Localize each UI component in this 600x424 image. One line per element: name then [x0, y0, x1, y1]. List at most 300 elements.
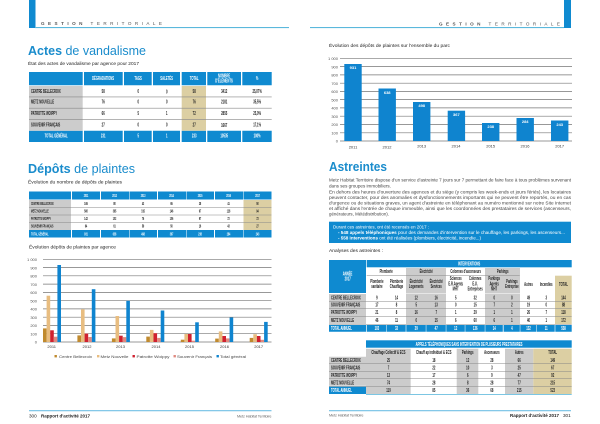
- table: appels telephoniques sans intervention: 17: [432, 372, 436, 378]
- table: appels telephoniques sans intervention: 119: [386, 387, 391, 393]
- table: depots de plaintes par annee: METZ NOUVELLE: [31, 209, 49, 214]
- table: interventions d'astreinte: 103: [375, 325, 380, 331]
- table: interventions d'astreinte: Autres: [524, 281, 533, 287]
- table: interventions d'astreinte: Entreprises: [468, 286, 483, 292]
- table: interventions d'astreinte: 5: [455, 295, 457, 301]
- bar chart: depots par agence: 2014: [152, 344, 161, 349]
- table: interventions d'astreinte: 15: [435, 317, 438, 323]
- bar chart: depots ensemble du parc: 300: [331, 114, 339, 119]
- table: appels telephoniques sans intervention: 25: [518, 364, 521, 371]
- subtitle: evolution sur le parc: Évolution des dépôts de plaintes sur l'ensemble du parc: [329, 42, 451, 48]
- table: appels telephoniques sans intervention: PATROTTE WOIPPY: [331, 372, 357, 378]
- paragraph: astreintes: et affiché dans l'entrée de chaque immeuble, ainsi que les coordonnées des prestataires de services (ascenseurs,: [329, 206, 571, 211]
- table: appels telephoniques sans intervention: 215: [550, 379, 556, 386]
- table: interventions d'astreinte: 47: [435, 325, 438, 331]
- table: interventions d'astreinte: 12: [454, 325, 458, 331]
- table: interventions d'astreinte: 136: [473, 325, 478, 331]
- table: interventions d'astreinte: INTERVENTIONS: [458, 260, 480, 267]
- table: actes de vandalisme par agence: 25,07%: [252, 88, 262, 94]
- bar chart: depots par agence: 2013: [116, 344, 126, 349]
- table: appels telephoniques sans intervention: 25: [387, 357, 391, 363]
- chart legend: Metz Nouvelle: [100, 354, 129, 359]
- subtitle: evolution du nombre: Évolution du nombre de dépôts de plaintes: [28, 178, 123, 184]
- table: depots de plaintes par annee: 2013: [141, 193, 145, 198]
- table: interventions d'astreinte: 19: [527, 302, 531, 308]
- table: appels telephoniques sans intervention: 8: [467, 379, 469, 386]
- table: interventions d'astreinte: 29: [474, 309, 477, 315]
- table: appels telephoniques sans intervention: 523: [550, 387, 556, 393]
- table: interventions d'astreinte: Colonnes: [469, 275, 482, 281]
- bar chart: depots par agence: 900: [30, 265, 38, 270]
- callout: bilan des astreintes: - 558 interventions ont été réalisées (plombiers, électricité, incendie...): [338, 236, 481, 240]
- paragraph: astreintes: dans ses groupes immobiliers.: [329, 184, 391, 188]
- table: depots de plaintes par annee: 2011: [84, 193, 88, 198]
- table: appels telephoniques sans intervention: 10: [466, 364, 470, 371]
- table: appels telephoniques sans intervention: 28: [490, 357, 494, 363]
- bar chart: depots par agence: 2012: [83, 344, 92, 349]
- table: interventions d'astreinte: 49: [527, 295, 531, 301]
- bar chart: depots ensemble du parc: 2015: [486, 144, 496, 148]
- table: depots de plaintes par annee: 97: [199, 209, 201, 214]
- table: actes de vandalisme par agence: 35,5%: [253, 99, 261, 105]
- heading: astreintes: Astreintes: [329, 160, 387, 174]
- table: interventions d'astreinte: PATROTTE WOIPPY: [331, 309, 357, 315]
- table: depots de plaintes par annee: 80: [113, 201, 116, 206]
- chart legend: [54, 354, 246, 359]
- table: actes de vandalisme par agence: 58: [193, 88, 196, 94]
- bar chart: depots ensemble du parc: 238: [487, 124, 495, 129]
- table: actes de vandalisme par agence: DÉGRADATIONS: [92, 75, 114, 81]
- table: interventions d'astreinte: 1: [455, 309, 457, 315]
- table: interventions d'astreinte: 132: [526, 325, 531, 331]
- table: appels telephoniques sans intervention: 85: [432, 387, 436, 393]
- table: interventions d'astreinte: Colonnes d'ascenseurs: [450, 268, 482, 274]
- bar chart: depots ensemble du parc: 200: [331, 122, 339, 127]
- table: appels telephoniques sans intervention: 7: [388, 364, 390, 371]
- table: depots de plaintes par annee: 72: [256, 216, 259, 221]
- table: interventions d'astreinte: 0: [545, 302, 547, 308]
- table: interventions d'astreinte: Entreprise: [505, 283, 519, 289]
- paragraph: astreintes: d'urgence ou de situations graves, un agent d'astreinte en téléphonant au numéro mentionné sur notre Site Internet: [329, 200, 572, 206]
- table: depots de plaintes par annee: 128: [227, 209, 230, 214]
- bar chart: depots ensemble du parc: 284: [522, 119, 529, 124]
- table: depots de plaintes par annee: SOUVENIR FRANÇAIS: [31, 224, 54, 229]
- table: depots de plaintes par annee: 76: [142, 216, 144, 221]
- bar chart: depots ensemble du parc: 800: [331, 73, 339, 78]
- bar chart: depots par agence: 700: [30, 282, 38, 287]
- table: interventions d'astreinte: Logements: [409, 283, 424, 289]
- bar chart: depots ensemble du parc: 2011: [349, 144, 358, 150]
- table: actes de vandalisme par agence: D'ÉLÉMENTS: [215, 78, 233, 84]
- table: depots de plaintes par annee: 28: [199, 201, 201, 206]
- table: depots de plaintes par annee: 43: [142, 201, 144, 206]
- callout: bilan des astreintes: Durant ces astreintes, ont été recensés en 2017 :: [333, 224, 429, 230]
- table: appels telephoniques sans intervention: 215: [517, 387, 522, 393]
- paragraph: astreintes: peuvent contacter, pour des anomalies et dysfonctionnements importants qui ne peuvent être reportés, ou en cas: [329, 195, 572, 200]
- table: actes de vandalisme par agence: 2855: [221, 110, 228, 116]
- table: interventions d'astreinte: 9: [376, 295, 378, 301]
- callout: bilan des astreintes: - 548 appels téléphoniques pour des demandes d'intervention sur le chauffage, les parkings, les ascenseurs...: [338, 230, 565, 235]
- table: interventions d'astreinte: 5: [415, 302, 417, 308]
- table: interventions d'astreinte: TOTAL: [559, 281, 568, 287]
- table: appels telephoniques sans intervention: TOTAL: [548, 349, 557, 355]
- table: depots de plaintes par annee: CENTRE BELLECROIX: [31, 201, 54, 206]
- paragraph: astreintes: générateurs, Métédistribution).: [329, 212, 389, 216]
- table: depots de plaintes par annee: 238: [198, 232, 202, 237]
- table: depots de plaintes par annee: 64: [85, 224, 87, 229]
- table: appels telephoniques sans intervention: 3: [491, 364, 493, 371]
- table: appels telephoniques sans intervention: [329, 340, 572, 395]
- table: actes de vandalisme par agence: 66: [102, 110, 105, 116]
- table: interventions d'astreinte: Services: [431, 283, 442, 289]
- table: depots de plaintes par annee: 43: [227, 224, 230, 229]
- bar chart: depots par agence: 2011: [47, 344, 57, 349]
- bar chart: depots ensemble du parc: 367: [453, 112, 461, 117]
- table: interventions d'astreinte: 0: [415, 317, 417, 323]
- table: depots de plaintes par annee: 395: [113, 209, 116, 214]
- table: depots de plaintes par annee: 61: [113, 224, 116, 229]
- table: appels telephoniques sans intervention: 36: [466, 387, 470, 393]
- table: appels telephoniques sans intervention: 28: [432, 379, 436, 386]
- table: interventions d'astreinte: MHT: [453, 286, 459, 292]
- table: interventions d'astreinte: 17: [375, 302, 379, 308]
- bar chart: depots par agence: 500: [30, 298, 38, 303]
- table: actes de vandalisme par agence: 1667: [221, 122, 228, 128]
- table: interventions d'astreinte: 16: [435, 295, 438, 301]
- table: actes de vandalisme par agence: 2181: [221, 99, 228, 105]
- table: depots de plaintes par annee: 41: [227, 201, 230, 206]
- table: appels telephoniques sans intervention: 67: [551, 364, 555, 371]
- table: depots de plaintes par annee: 2014: [169, 193, 174, 198]
- table: interventions d'astreinte: 0: [493, 295, 495, 301]
- left page footer: Rapport d'activité 2017: [41, 414, 90, 418]
- table: actes de vandalisme par agence: CENTRE BELLECROIX: [31, 88, 61, 94]
- table: actes de vandalisme par agence: 27: [193, 122, 196, 128]
- table: interventions d'astreinte: 16: [415, 309, 418, 315]
- bar chart: depots ensemble du parc: 700: [331, 81, 339, 86]
- table: interventions d'astreinte: 14: [493, 325, 496, 331]
- bar chart: depots par agence: 2015: [185, 344, 195, 349]
- table: appels telephoniques sans intervention: 66: [518, 357, 521, 363]
- table: appels telephoniques sans intervention: Autres: [515, 349, 524, 355]
- table: interventions d'astreinte: 1: [545, 317, 547, 323]
- table: interventions d'astreinte: 3: [545, 295, 547, 301]
- bar chart: depots par agence: 100: [30, 331, 38, 336]
- table: interventions d'astreinte: 12: [415, 295, 418, 301]
- table: depots de plaintes par annee: 2015: [198, 193, 202, 198]
- table: actes de vandalisme par agence: 5: [137, 110, 139, 116]
- table: depots de plaintes par annee: 560: [84, 209, 88, 214]
- table: interventions d'astreinte: 14: [395, 295, 399, 301]
- table: interventions d'astreinte: 26: [527, 309, 531, 315]
- table: interventions d'astreinte: 0: [511, 295, 513, 301]
- table: actes de vandalisme par agence: 0: [137, 88, 139, 94]
- table: interventions d'astreinte: 1: [511, 309, 513, 315]
- table: interventions d'astreinte: ANNÉE: [343, 271, 353, 277]
- table: interventions d'astreinte: 11: [395, 317, 398, 323]
- table: depots de plaintes par annee: 72: [227, 216, 230, 221]
- bar chart: depots ensemble du parc: 0: [336, 139, 339, 144]
- table: appels telephoniques sans intervention: 13: [387, 372, 391, 378]
- table: depots de plaintes par annee: 2016: [226, 193, 231, 198]
- table: actes de vandalisme par agence: METZ NOUVELLE: [31, 99, 54, 105]
- table: interventions d'astreinte: E.U.: [472, 280, 478, 287]
- table: actes de vandalisme par agence: NOMBRE: [218, 73, 230, 79]
- table: interventions d'astreinte: Électricité: [420, 268, 433, 274]
- left page header: GESTION TERRITORIALE: [41, 21, 162, 26]
- bar chart: depots ensemble du parc: 400: [331, 106, 339, 111]
- table: actes de vandalisme par agence: TOTAL: [190, 75, 199, 81]
- bar chart: depots par agence: 300: [30, 315, 38, 320]
- table: depots de plaintes par annee: 146: [170, 209, 173, 214]
- table: interventions d'astreinte: 8: [396, 309, 398, 315]
- bar chart: depots par agence: 400: [30, 307, 38, 312]
- table: actes de vandalisme par agence: 10535: [220, 133, 229, 139]
- table: interventions d'astreinte: 7: [545, 309, 547, 315]
- bar chart: depots ensemble du parc: 500: [331, 97, 339, 102]
- bar chart: depots ensemble du parc: 900: [331, 64, 339, 69]
- table: depots de plaintes par annee: 27: [256, 224, 259, 229]
- bar chart: depots ensemble du parc: 2013: [417, 144, 427, 148]
- table: interventions d'astreinte: Sciences: [450, 275, 462, 281]
- table: depots de plaintes par annee: [29, 192, 272, 238]
- table: interventions d'astreinte: 21: [375, 309, 379, 315]
- bar chart: depots par agence: 800: [30, 274, 38, 278]
- table: actes de vandalisme par agence: 76: [193, 99, 196, 105]
- chart legend: Souvenir Français: [177, 354, 212, 359]
- table: interventions d'astreinte: 8: [396, 302, 398, 308]
- left page footer: Metz Habitat Territoire: [237, 414, 272, 418]
- table: depots de plaintes par annee: 142: [84, 216, 88, 221]
- table: interventions d'astreinte: E.R.Agents: [448, 280, 464, 287]
- table: actes de vandalisme par agence: 27: [102, 122, 105, 128]
- table: appels telephoniques sans intervention: 22: [432, 364, 436, 371]
- bar chart: depots ensemble du parc: 638: [384, 90, 391, 95]
- table: actes de vandalisme par agence: 0: [166, 89, 168, 95]
- chart legend: Patrotte Woippy: [136, 354, 170, 359]
- table: depots de plaintes par annee: 243: [256, 232, 259, 237]
- table: appels telephoniques sans intervention: 28: [490, 379, 494, 386]
- table: interventions d'astreinte: METZ NOUVELLE: [331, 317, 354, 323]
- table: interventions d'astreinte: sanitaire: [371, 283, 383, 289]
- table: interventions d'astreinte: 13: [435, 302, 438, 308]
- table: interventions d'astreinte: Parkings: [497, 268, 509, 274]
- table: actes de vandalisme par agence: SOUVENIR FRANÇAIS: [31, 122, 60, 128]
- table: actes de vandalisme par agence: 25,0%: [253, 110, 261, 116]
- table: interventions d'astreinte: 2017: [345, 276, 351, 282]
- table: interventions d'astreinte: 40: [527, 317, 531, 323]
- table: appels telephoniques sans intervention: SOUVENIR FRANÇAIS: [331, 364, 360, 371]
- table: depots de plaintes par annee: 94: [256, 209, 259, 214]
- table: interventions d'astreinte: 1: [493, 309, 495, 315]
- chart legend: Total général: [220, 354, 246, 359]
- chart legend: Centre Bellecroix: [59, 354, 92, 359]
- subtitle: analyses des astreintes: Analyses des astreintes :: [329, 248, 383, 253]
- table: interventions d'astreinte: 4: [511, 325, 513, 331]
- bar chart: depots par agence: 200: [30, 323, 38, 328]
- table: actes de vandalisme par agence: TOTAL GÉNÉRAL: [45, 133, 68, 139]
- table: appels telephoniques sans intervention: 77: [518, 379, 521, 386]
- table: interventions d'astreinte: 11: [545, 325, 548, 331]
- right page footer: Metz Habitat Territoire: [329, 414, 364, 418]
- table: depots de plaintes par annee: 498: [141, 232, 145, 237]
- right page header: [310, 0, 571, 28]
- table: actes de vandalisme par agence: 58: [102, 88, 105, 94]
- table: appels telephoniques sans intervention: 74: [387, 379, 391, 386]
- table: interventions d'astreinte: Chauffage: [390, 283, 404, 289]
- table: actes de vandalisme par agence: 5: [137, 133, 139, 139]
- table: depots de plaintes par annee: 315: [141, 209, 145, 214]
- table: depots de plaintes par annee: TOTAL GÉNÉRAL: [31, 230, 49, 237]
- table: depots de plaintes par annee: 97: [199, 216, 201, 221]
- table: actes de vandalisme par agence: 0: [137, 122, 139, 128]
- table: depots de plaintes par annee: 2017: [255, 193, 260, 198]
- table: interventions d'astreinte: Plomberie: [380, 268, 393, 274]
- table: interventions d'astreinte: 88: [562, 302, 566, 308]
- table: actes de vandalisme par agence: 0: [166, 122, 168, 128]
- table: interventions d'astreinte: 1: [511, 317, 513, 323]
- table: interventions d'astreinte: Parkings: [488, 275, 501, 281]
- bar chart: depots par agence: 1 000: [27, 257, 38, 262]
- bar chart: depots ensemble du parc: 2014: [452, 144, 461, 148]
- table: interventions d'astreinte: Plomberie: [370, 278, 384, 284]
- table: appels telephoniques sans intervention: 9: [491, 372, 493, 378]
- table: actes de vandalisme par agence: 76: [102, 99, 105, 105]
- table: actes de vandalisme par agence: 0: [137, 99, 139, 105]
- table: interventions d'astreinte: Incendies: [540, 281, 553, 287]
- table: appels telephoniques sans intervention: 92: [551, 372, 555, 378]
- table: depots de plaintes par annee: 931: [84, 232, 88, 237]
- table: depots de plaintes par annee: 50: [256, 201, 259, 206]
- bar chart: depots ensemble du parc: 498: [418, 103, 426, 108]
- paragraph: astreintes: Metz Habitat Territoire dispose d'un service d'astreinte 7 jours sur 7 permettant de faire face à tous problèmes survenant: [329, 178, 572, 182]
- bar chart: depots ensemble du parc: 2012: [383, 144, 392, 150]
- table: actes de vandalisme par agence: 100%: [254, 133, 261, 139]
- right page footer: Rapport d'activité 2017: [510, 413, 559, 418]
- bar chart: depots par agence: 0: [35, 340, 38, 345]
- table: depots de plaintes par annee: 50: [170, 224, 173, 229]
- table: depots de plaintes par annee: 16: [199, 224, 201, 229]
- table: interventions d'astreinte: 118: [561, 309, 566, 315]
- table: appels telephoniques sans intervention: Chauff ap individuel & ECS: [416, 349, 452, 355]
- table: interventions d'astreinte: 558: [561, 325, 566, 331]
- table: actes de vandalisme par agence: 1: [166, 133, 168, 139]
- table: depots de plaintes par annee: 367: [170, 232, 173, 237]
- table: depots de plaintes par annee: 2012: [112, 193, 117, 198]
- table: actes de vandalisme par agence: 231: [101, 133, 106, 139]
- table: appels telephoniques sans intervention: CENTRE BELLECROIX: [331, 357, 361, 363]
- heading: actes de vandalisme: Actes de vandalisme: [28, 44, 146, 58]
- left page footer: 300: [29, 414, 37, 418]
- table: actes de vandalisme par agence: PATROTTE WOIPPY: [31, 110, 57, 116]
- table: interventions d'astreinte: [329, 260, 572, 332]
- heading: depots de plaintes: Dépôts de plaintes: [28, 162, 135, 176]
- left page footer: [29, 410, 272, 418]
- table: depots de plaintes par annee: 165: [84, 201, 88, 206]
- table: actes de vandalisme par agence: 1: [166, 110, 168, 116]
- table: appels telephoniques sans intervention: 6: [467, 372, 469, 378]
- table: actes de vandalisme par agence: SALETÉS: [160, 75, 173, 81]
- table: depots de plaintes par annee: 65: [170, 201, 173, 206]
- table: depots de plaintes par annee: 102: [113, 216, 116, 221]
- bar chart: depots ensemble du parc: 2016: [521, 144, 530, 148]
- table: interventions d'astreinte: 172: [561, 317, 566, 323]
- table: depots de plaintes par annee: 59: [142, 224, 144, 229]
- table: interventions d'astreinte: Parkings: [506, 278, 518, 284]
- table: interventions d'astreinte: Agents: [490, 280, 499, 287]
- table: interventions d'astreinte: Électricité: [430, 278, 443, 284]
- bar chart: depots par agence: 600: [30, 290, 38, 295]
- table: depots de plaintes par annee: 284: [227, 232, 230, 237]
- table: interventions d'astreinte: 0: [455, 302, 457, 308]
- callout: bilan des astreintes: [329, 222, 571, 243]
- bar chart: depots par agence: 2016: [220, 344, 230, 349]
- bar chart: depots par agence: [27, 257, 272, 359]
- table: depots de plaintes par annee: PATROTTE WOIPPY: [31, 216, 51, 221]
- table: appels telephoniques sans intervention: 149: [550, 357, 556, 363]
- bar chart: depots ensemble du parc: 1 000: [328, 56, 339, 61]
- table: actes de vandalisme par agence: 72: [193, 110, 196, 116]
- table: interventions d'astreinte: 7: [493, 302, 495, 308]
- table: actes de vandalisme par agence: 233: [192, 133, 197, 139]
- table: appels telephoniques sans intervention: Chauffage Collectif & ECS: [371, 349, 406, 355]
- table: interventions d'astreinte: MHT: [491, 286, 497, 292]
- table: actes de vandalisme par agence: 3412: [221, 88, 228, 94]
- table: interventions d'astreinte: Électricité: [410, 278, 423, 284]
- table: appels telephoniques sans intervention: TOTAL ANNUEL: [331, 387, 352, 393]
- table: depots de plaintes par annee: 638: [113, 232, 116, 237]
- table: interventions d'astreinte: 60: [474, 317, 477, 323]
- table: appels telephoniques sans intervention: 47: [518, 372, 521, 378]
- table: actes de vandalisme par agence: 0: [166, 99, 168, 105]
- table: interventions d'astreinte: 15: [474, 302, 477, 308]
- paragraph: astreintes: En dehors des heures d'ouverture des agences et du siège (y compris les week-ends et jours fériés), les locataires: [329, 190, 572, 194]
- left page header: [29, 0, 289, 28]
- table: interventions d'astreinte: Plomberie: [390, 278, 404, 284]
- bar chart: depots ensemble du parc: 931: [350, 65, 357, 70]
- table: interventions d'astreinte: SOUVENIR FRANÇAIS: [331, 302, 360, 308]
- table: depots de plaintes par annee: 106: [170, 216, 173, 221]
- table: actes de vandalisme par agence: [29, 72, 272, 142]
- bar chart: depots ensemble du parc: 243: [556, 122, 564, 127]
- bar chart: depots ensemble du parc: 600: [331, 89, 339, 94]
- bar chart: depots ensemble du parc: [328, 56, 572, 150]
- table: appels telephoniques sans intervention: METZ NOUVELLE: [331, 379, 354, 386]
- table: appels telephoniques sans intervention: APPELS TÉLÉPHONIQUES SANS INTERVENTION DE PLUSIEURS PRESTATAIRES: [416, 341, 523, 347]
- right page footer: [329, 410, 571, 418]
- table: appels telephoniques sans intervention: 12: [466, 357, 470, 363]
- table: actes de vandalisme par agence: TAGS: [134, 75, 142, 81]
- table: interventions d'astreinte: CENTRE BELLECROIX: [331, 295, 361, 301]
- subtitle: evolution par agence: Évolution dépôts de plaintes par agence: [29, 244, 116, 250]
- table: interventions d'astreinte: 33: [395, 325, 399, 331]
- bar chart: depots par agence: 2017: [254, 344, 264, 349]
- paragraph: astreintes: [329, 178, 572, 216]
- table: interventions d'astreinte: 144: [561, 295, 566, 301]
- table: interventions d'astreinte: 39: [415, 325, 418, 331]
- table: interventions d'astreinte: 32: [474, 295, 477, 301]
- table: interventions d'astreinte: 6: [493, 317, 495, 323]
- bar chart: depots ensemble du parc: 100: [331, 130, 339, 136]
- bar chart: depots ensemble du parc: 2017: [555, 144, 565, 148]
- table: actes de vandalisme par agence: %: [256, 75, 259, 81]
- table: interventions d'astreinte: 46: [375, 317, 379, 323]
- table: interventions d'astreinte: TOTAL ANNUEL: [331, 325, 352, 331]
- table: actes de vandalisme par agence: 17,1%: [253, 122, 261, 128]
- right page footer: 301: [563, 413, 571, 418]
- table: interventions d'astreinte: 6: [455, 317, 457, 323]
- table: appels telephoniques sans intervention: Parkings: [462, 349, 474, 355]
